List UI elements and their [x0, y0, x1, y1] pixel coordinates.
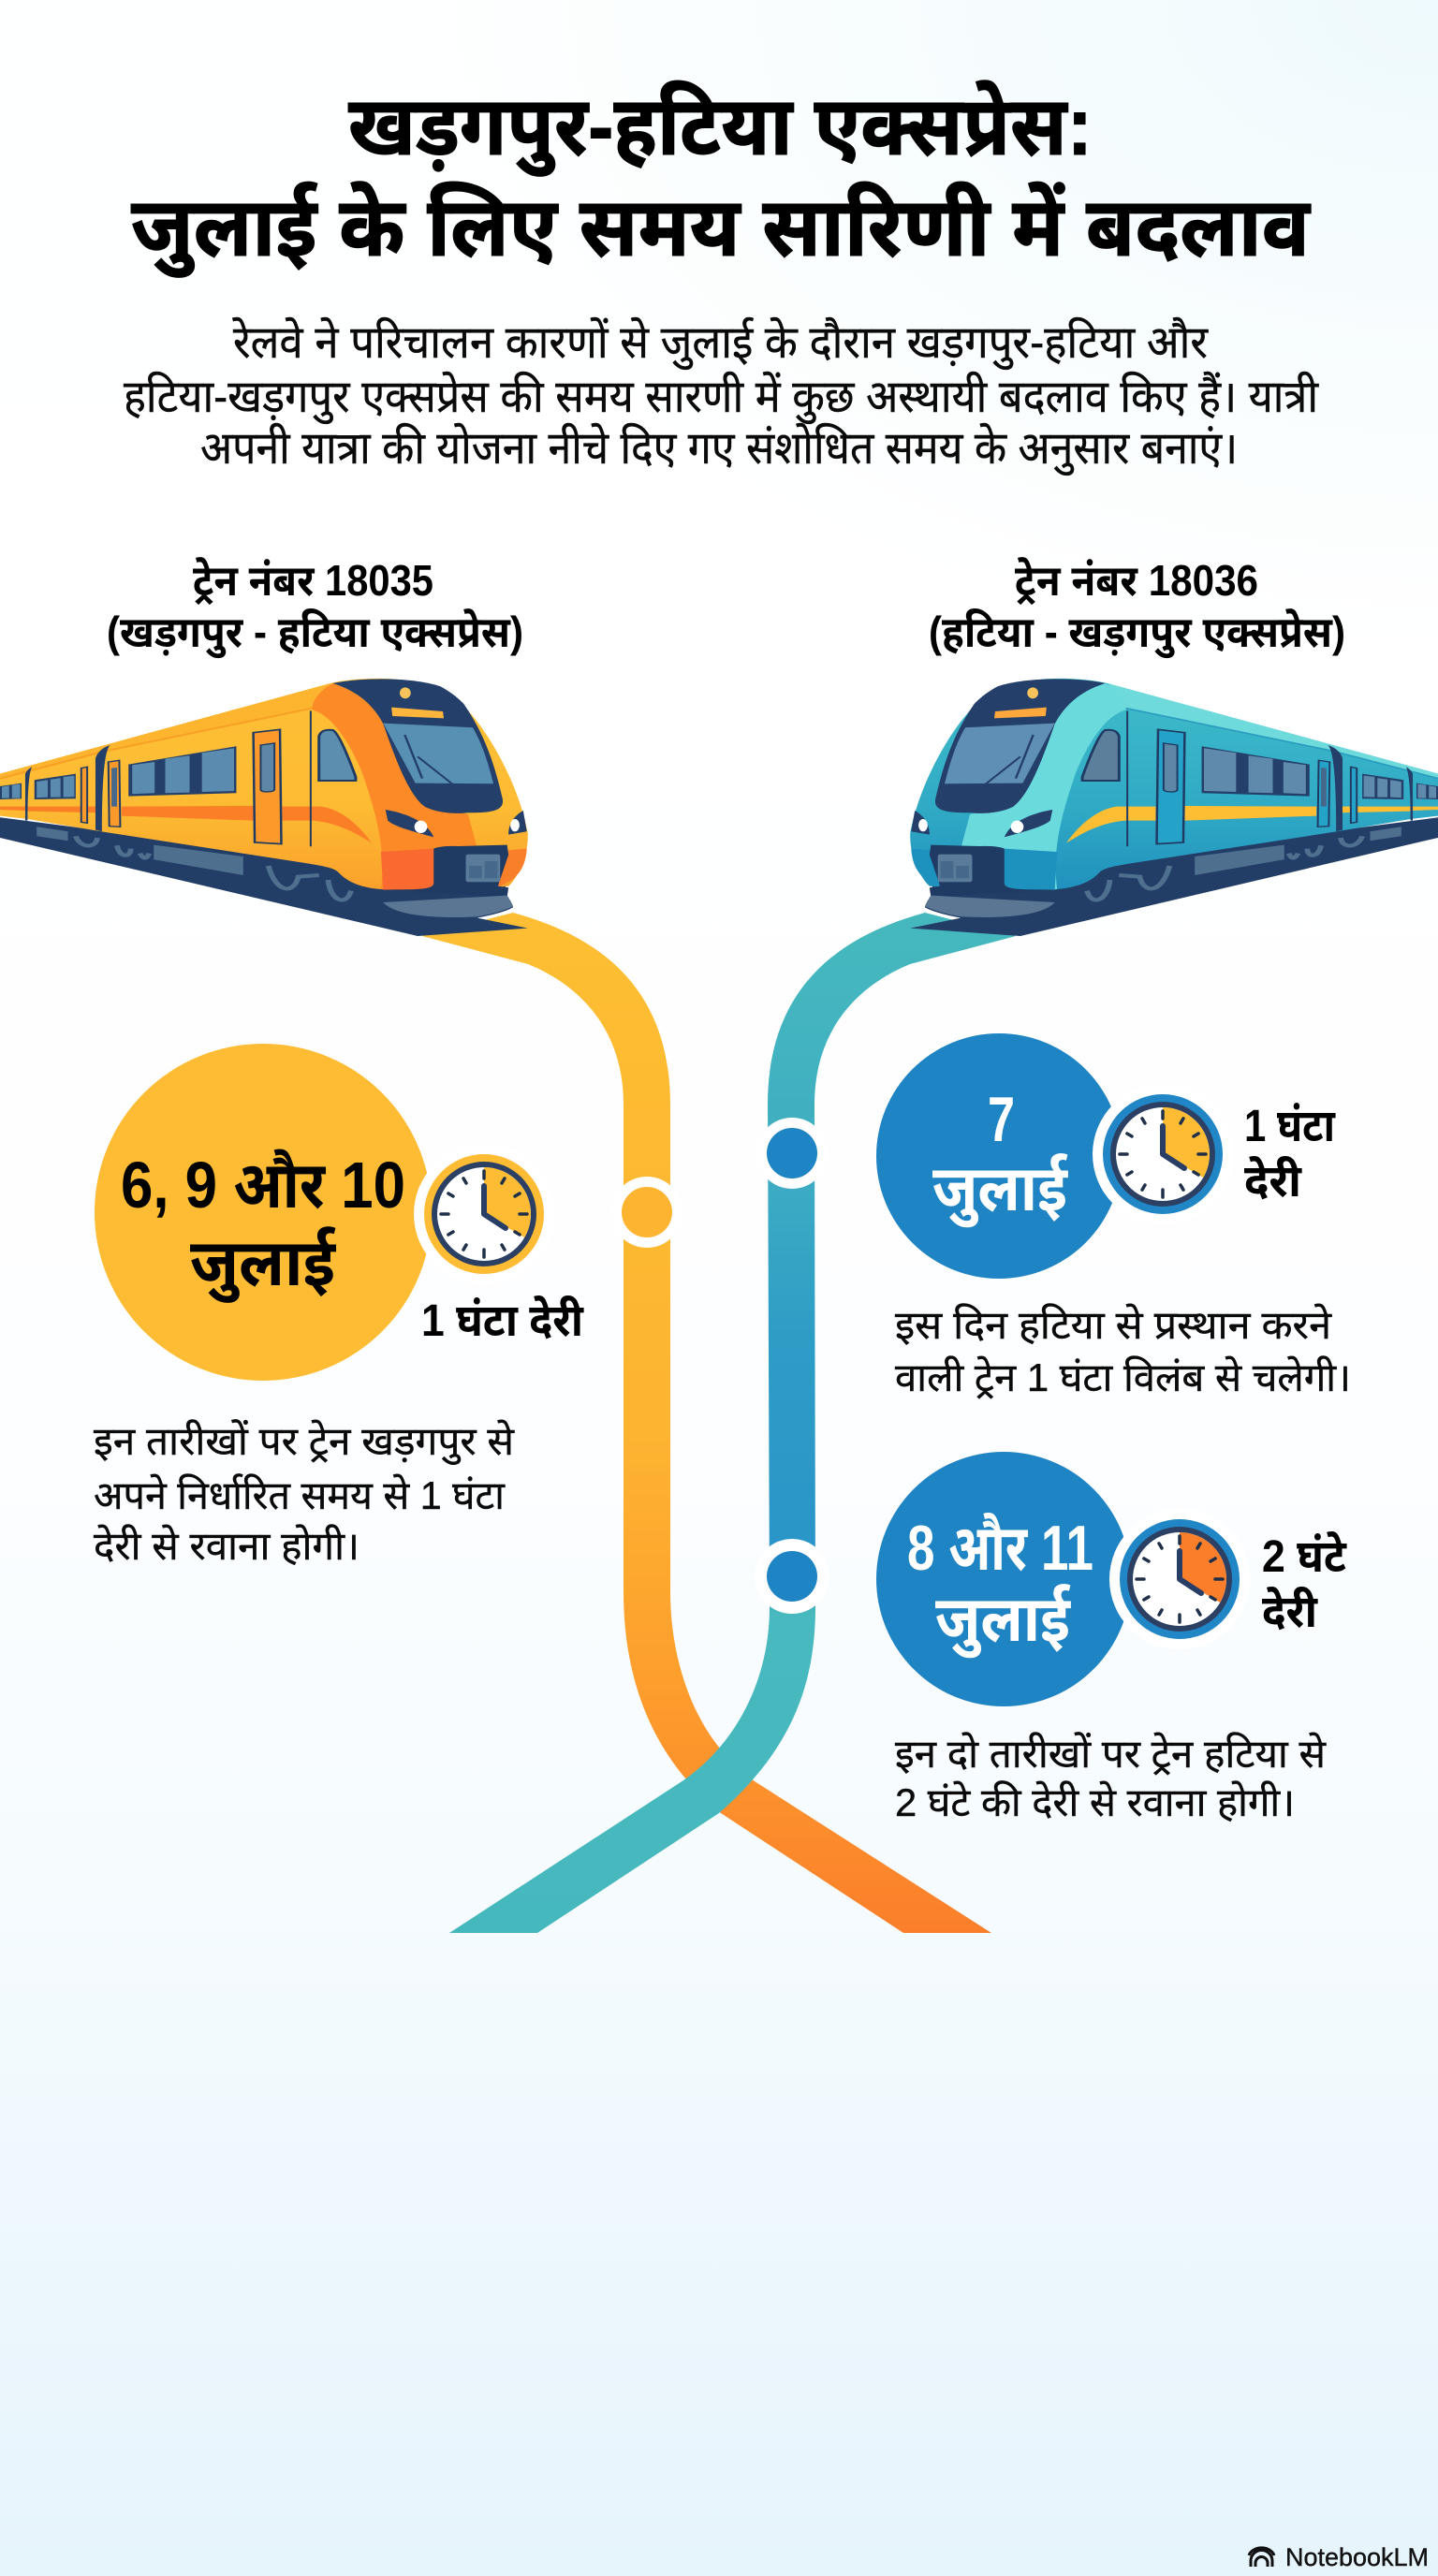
heading: train 18036: ट्रेन नंबर 18036	[1015, 555, 1258, 606]
train: teal 18036	[910, 679, 1438, 936]
date circle yellow	[95, 1044, 432, 1381]
track: teal line 18036	[449, 913, 1016, 1933]
track node: right upper	[756, 1118, 828, 1189]
description: इन तारीखों पर ट्रेन खड़गपुर से	[94, 1419, 515, 1465]
description	[94, 1419, 515, 1568]
icon: clock 2 hours	[1109, 1509, 1250, 1649]
date text: 6, 9 और 10	[121, 1149, 405, 1222]
description: 2 घंटे की देरी से रवाना होगी।	[895, 1780, 1295, 1824]
heading: train 18036	[929, 555, 1345, 658]
description	[895, 1303, 1351, 1399]
date text: जुलाई	[190, 1226, 336, 1304]
description: इन दो तारीखों पर ट्रेन हटिया से	[895, 1732, 1327, 1776]
notebooklm badge: NotebookLM	[1285, 2543, 1429, 2571]
icon: clock 1 hour	[1093, 1084, 1233, 1224]
track node: right lower	[755, 1539, 829, 1614]
description: अपने निर्धारित समय से 1 घंटा	[94, 1473, 506, 1517]
delay label: 2 घंटे	[1262, 1530, 1347, 1582]
heading: train 18035: ट्रेन नंबर 18035	[193, 555, 433, 606]
title: खड़गपुर-हटिया एक्सप्रेस:	[348, 80, 1093, 177]
heading: train 18035: (खड़गपुर - हटिया एक्सप्रेस)	[107, 607, 523, 658]
track: orange line 18035	[422, 913, 991, 1933]
title: जुलाई के लिए समय सारिणी में बदलाव	[131, 181, 1312, 278]
train: orange 18035	[0, 679, 528, 936]
delay label: देरी	[1262, 1586, 1318, 1637]
date text: जुलाई	[932, 1153, 1068, 1227]
date circle blue	[876, 1452, 1131, 1706]
panel: 8 and 11 July	[876, 1452, 1347, 1824]
intro paragraph: अपनी यात्रा की योजना नीचे दिए गए संशोधित समय के अनुसार बनाएं।	[200, 422, 1238, 476]
icon: notebooklm mark	[1249, 2548, 1274, 2567]
delay label	[1262, 1530, 1347, 1637]
heading: train 18035	[107, 555, 523, 658]
heading: train 18036: (हटिया - खड़गपुर एक्सप्रेस)	[929, 607, 1345, 658]
panel: 7 July	[876, 1033, 1351, 1399]
panel: 6, 9 and 10 July	[94, 1044, 584, 1568]
date text: 7	[988, 1084, 1015, 1155]
description: वाली ट्रेन 1 घंटा विलंब से चलेगी।	[895, 1355, 1351, 1399]
delay label: 1 घंटा	[1244, 1102, 1336, 1151]
intro paragraph: हटिया-खड़गपुर एक्सप्रेस की समय सारणी में कुछ अस्थायी बदलाव किए हैं। यात्री	[124, 371, 1319, 425]
date text: 8 और 11	[907, 1513, 1093, 1584]
delay label: 1 घंटा देरी	[421, 1295, 584, 1346]
intro paragraph: रेलवे ने परिचालन कारणों से जुलाई के दौरान खड़गपुर-हटिया और	[231, 316, 1209, 371]
icon: clock 1 hour	[414, 1144, 554, 1284]
date text	[907, 1513, 1093, 1658]
intro paragraph	[124, 316, 1319, 476]
title	[131, 80, 1312, 278]
date text: जुलाई	[935, 1584, 1071, 1658]
date circle blue	[876, 1033, 1122, 1279]
description	[895, 1732, 1327, 1824]
track node: left	[611, 1177, 682, 1248]
delay label	[1244, 1102, 1336, 1207]
delay label: देरी	[1244, 1155, 1302, 1207]
date text	[932, 1084, 1068, 1227]
description: देरी से रवाना होगी।	[94, 1524, 360, 1568]
description: इस दिन हटिया से प्रस्थान करने	[895, 1303, 1332, 1347]
date text	[121, 1149, 405, 1304]
